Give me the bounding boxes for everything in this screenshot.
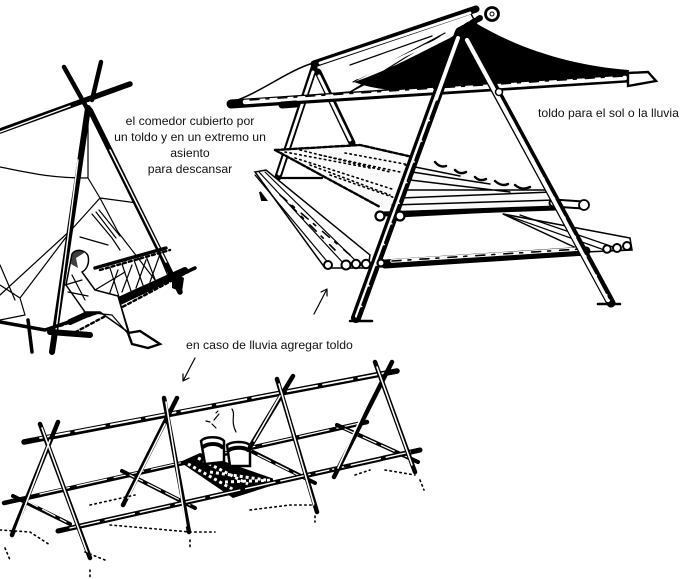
illustration: ground-level table frame with cooking pots: [0, 362, 424, 578]
arrow pointing to frame: [183, 358, 195, 381]
main front ridge pole: [231, 72, 656, 105]
caption: rain: en caso de lluvia agregar toldo: [186, 338, 353, 352]
middle pole: [4, 422, 367, 503]
caption: dining room: para descansar: [148, 162, 232, 176]
front right leg: [350, 36, 620, 321]
back A-frame legs: [278, 68, 352, 177]
front left leg: [356, 32, 460, 318]
caption: awning: toldo para el sol o la lluvia: [538, 106, 679, 120]
A-frame four: [334, 362, 415, 477]
A-frame three: [250, 376, 317, 512]
cooking pots: [201, 437, 250, 466]
lattice seat: [0, 248, 195, 335]
log raft of the fire: [180, 453, 283, 498]
caption: dining room: [114, 114, 266, 176]
far top pole: [24, 371, 397, 442]
seated person: [65, 250, 160, 348]
canvas lines: [0, 115, 155, 320]
folded canvas detail: [80, 210, 120, 250]
A-frame two: [123, 398, 189, 532]
table top of logs: [275, 145, 555, 216]
lower cross beam: [385, 249, 586, 264]
awning canvas, black right side: [354, 22, 629, 91]
caption: dining room: asiento: [170, 146, 210, 160]
right log bench: [503, 214, 632, 253]
grass and ground marks: [0, 465, 424, 578]
crossed poles of the frame: [0, 62, 180, 352]
left log bench: [255, 170, 370, 270]
caption: dining room: un toldo y en un extremo un: [114, 130, 266, 144]
awning canvas, light left side: [232, 12, 477, 102]
illustration: sun or rain awning over dining table: [231, 8, 656, 321]
canvas fold lines: [350, 33, 445, 92]
arrow pointing to bench: [314, 289, 327, 314]
table joint lashing: [376, 88, 502, 266]
front pole: [58, 450, 420, 531]
upper back pole: [314, 8, 498, 64]
A-frame one: [12, 422, 90, 558]
illustration: covered dining table with person resting on seat: [0, 62, 195, 352]
log at rear of table: [553, 200, 589, 210]
cross braces: [13, 425, 418, 524]
front table beam: [382, 208, 556, 214]
caption: dining room: el comedor cubierto por: [126, 114, 254, 128]
steam: [206, 409, 236, 432]
